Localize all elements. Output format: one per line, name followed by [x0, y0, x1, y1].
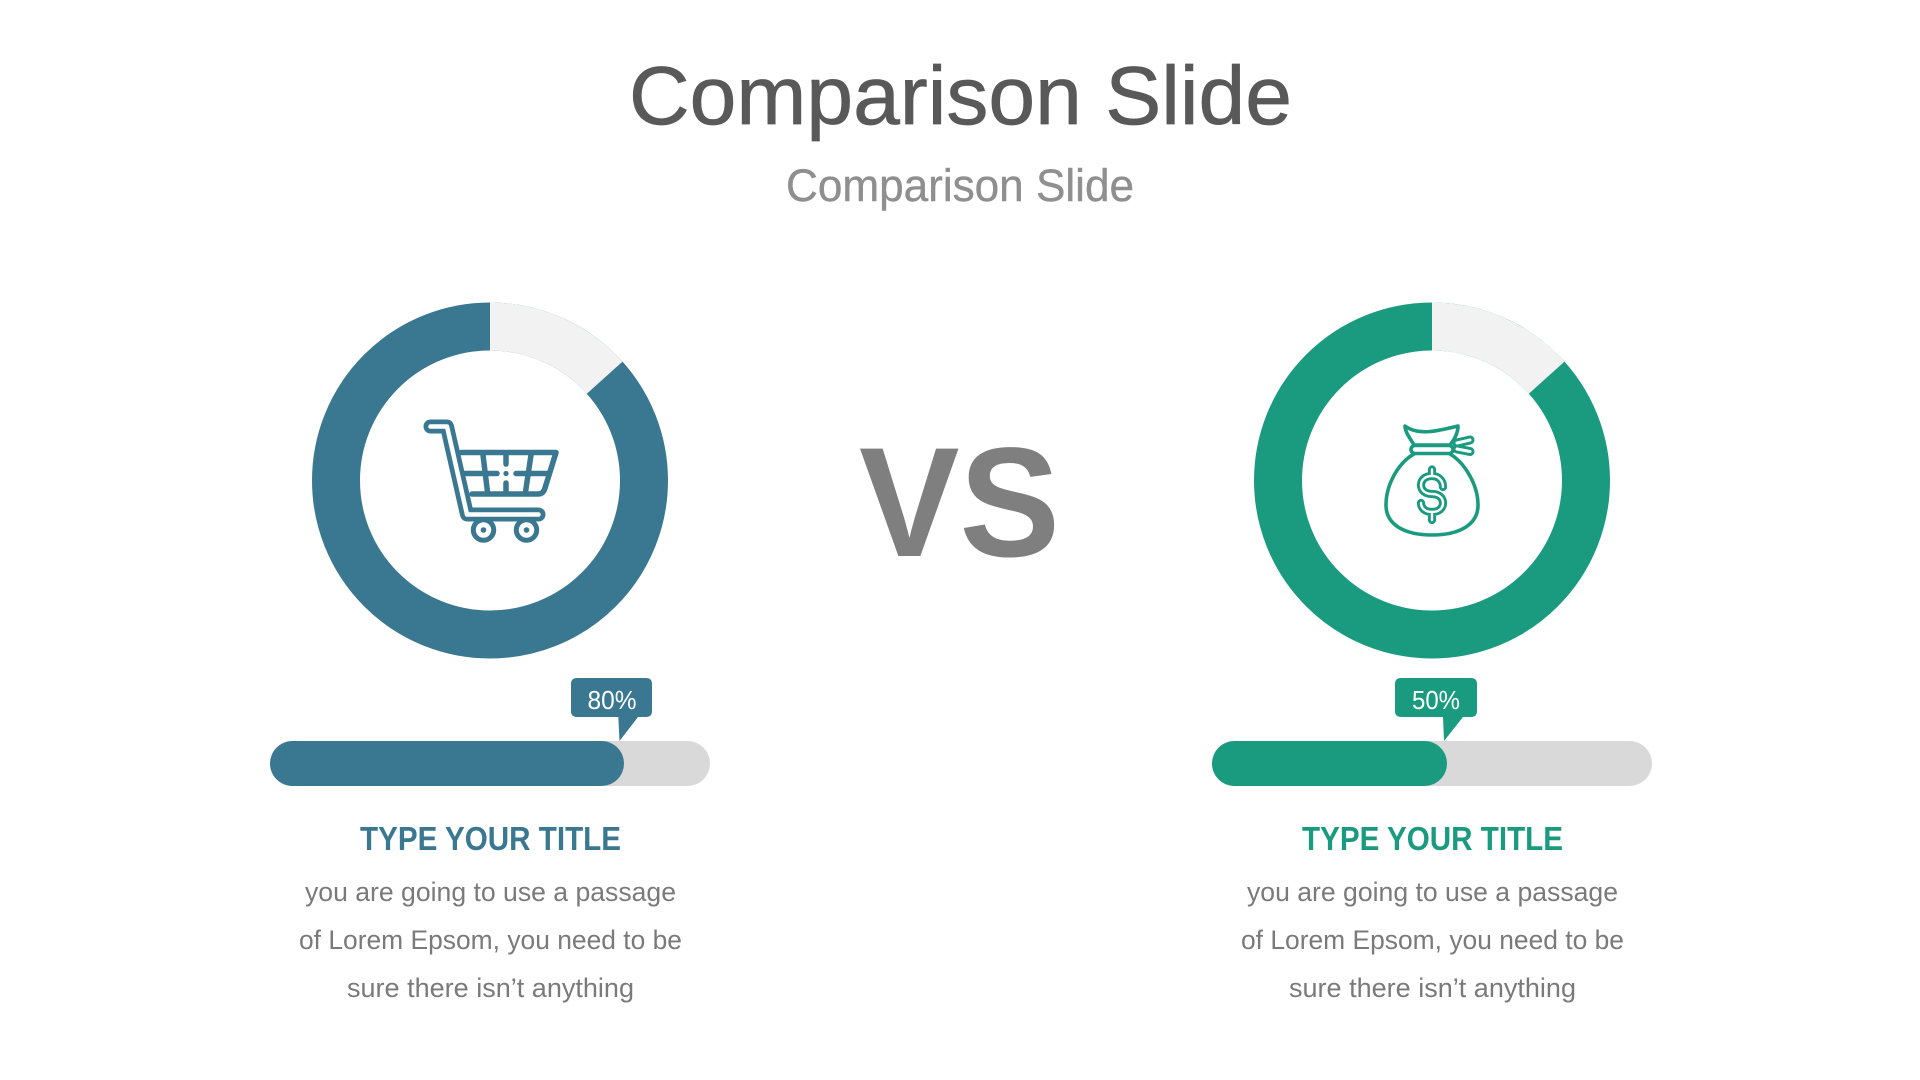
heading: right title: TYPE YOUR TITLE — [1302, 820, 1563, 857]
icon: money bag — [1386, 426, 1478, 535]
callout: 50% — [1395, 678, 1477, 741]
heading: left title: TYPE YOUR TITLE — [360, 820, 621, 857]
title: Comparison Slide — [629, 49, 1292, 142]
callout: 50%: 50% — [1412, 685, 1460, 715]
text block: right description — [1241, 877, 1624, 1003]
text block: right description: sure there isn’t anything — [1289, 973, 1576, 1003]
text block: left description — [299, 877, 682, 1003]
text block: right description: you are going to use a passage — [1247, 877, 1618, 907]
icon: shopping cart — [430, 426, 556, 540]
progress bar: 50% — [1212, 741, 1652, 786]
text block: left description: sure there isn’t anything — [347, 973, 634, 1003]
VS label: VS — [859, 416, 1060, 590]
panel: left comparison — [270, 302, 710, 1003]
progress bar: 80% — [270, 741, 710, 786]
text block: right description: of Lorem Epsom, you need to be — [1241, 925, 1624, 955]
donut chart: right — [1278, 302, 1586, 634]
donut chart: left — [336, 302, 644, 634]
text block: left description: of Lorem Epsom, you need to be — [299, 925, 682, 955]
panel: right comparison — [1212, 302, 1652, 1003]
callout: 80%: 80% — [588, 685, 636, 715]
text block: left description: you are going to use a passage — [305, 877, 676, 907]
subtitle: Comparison Slide — [786, 160, 1134, 211]
callout: 80% — [571, 678, 652, 741]
